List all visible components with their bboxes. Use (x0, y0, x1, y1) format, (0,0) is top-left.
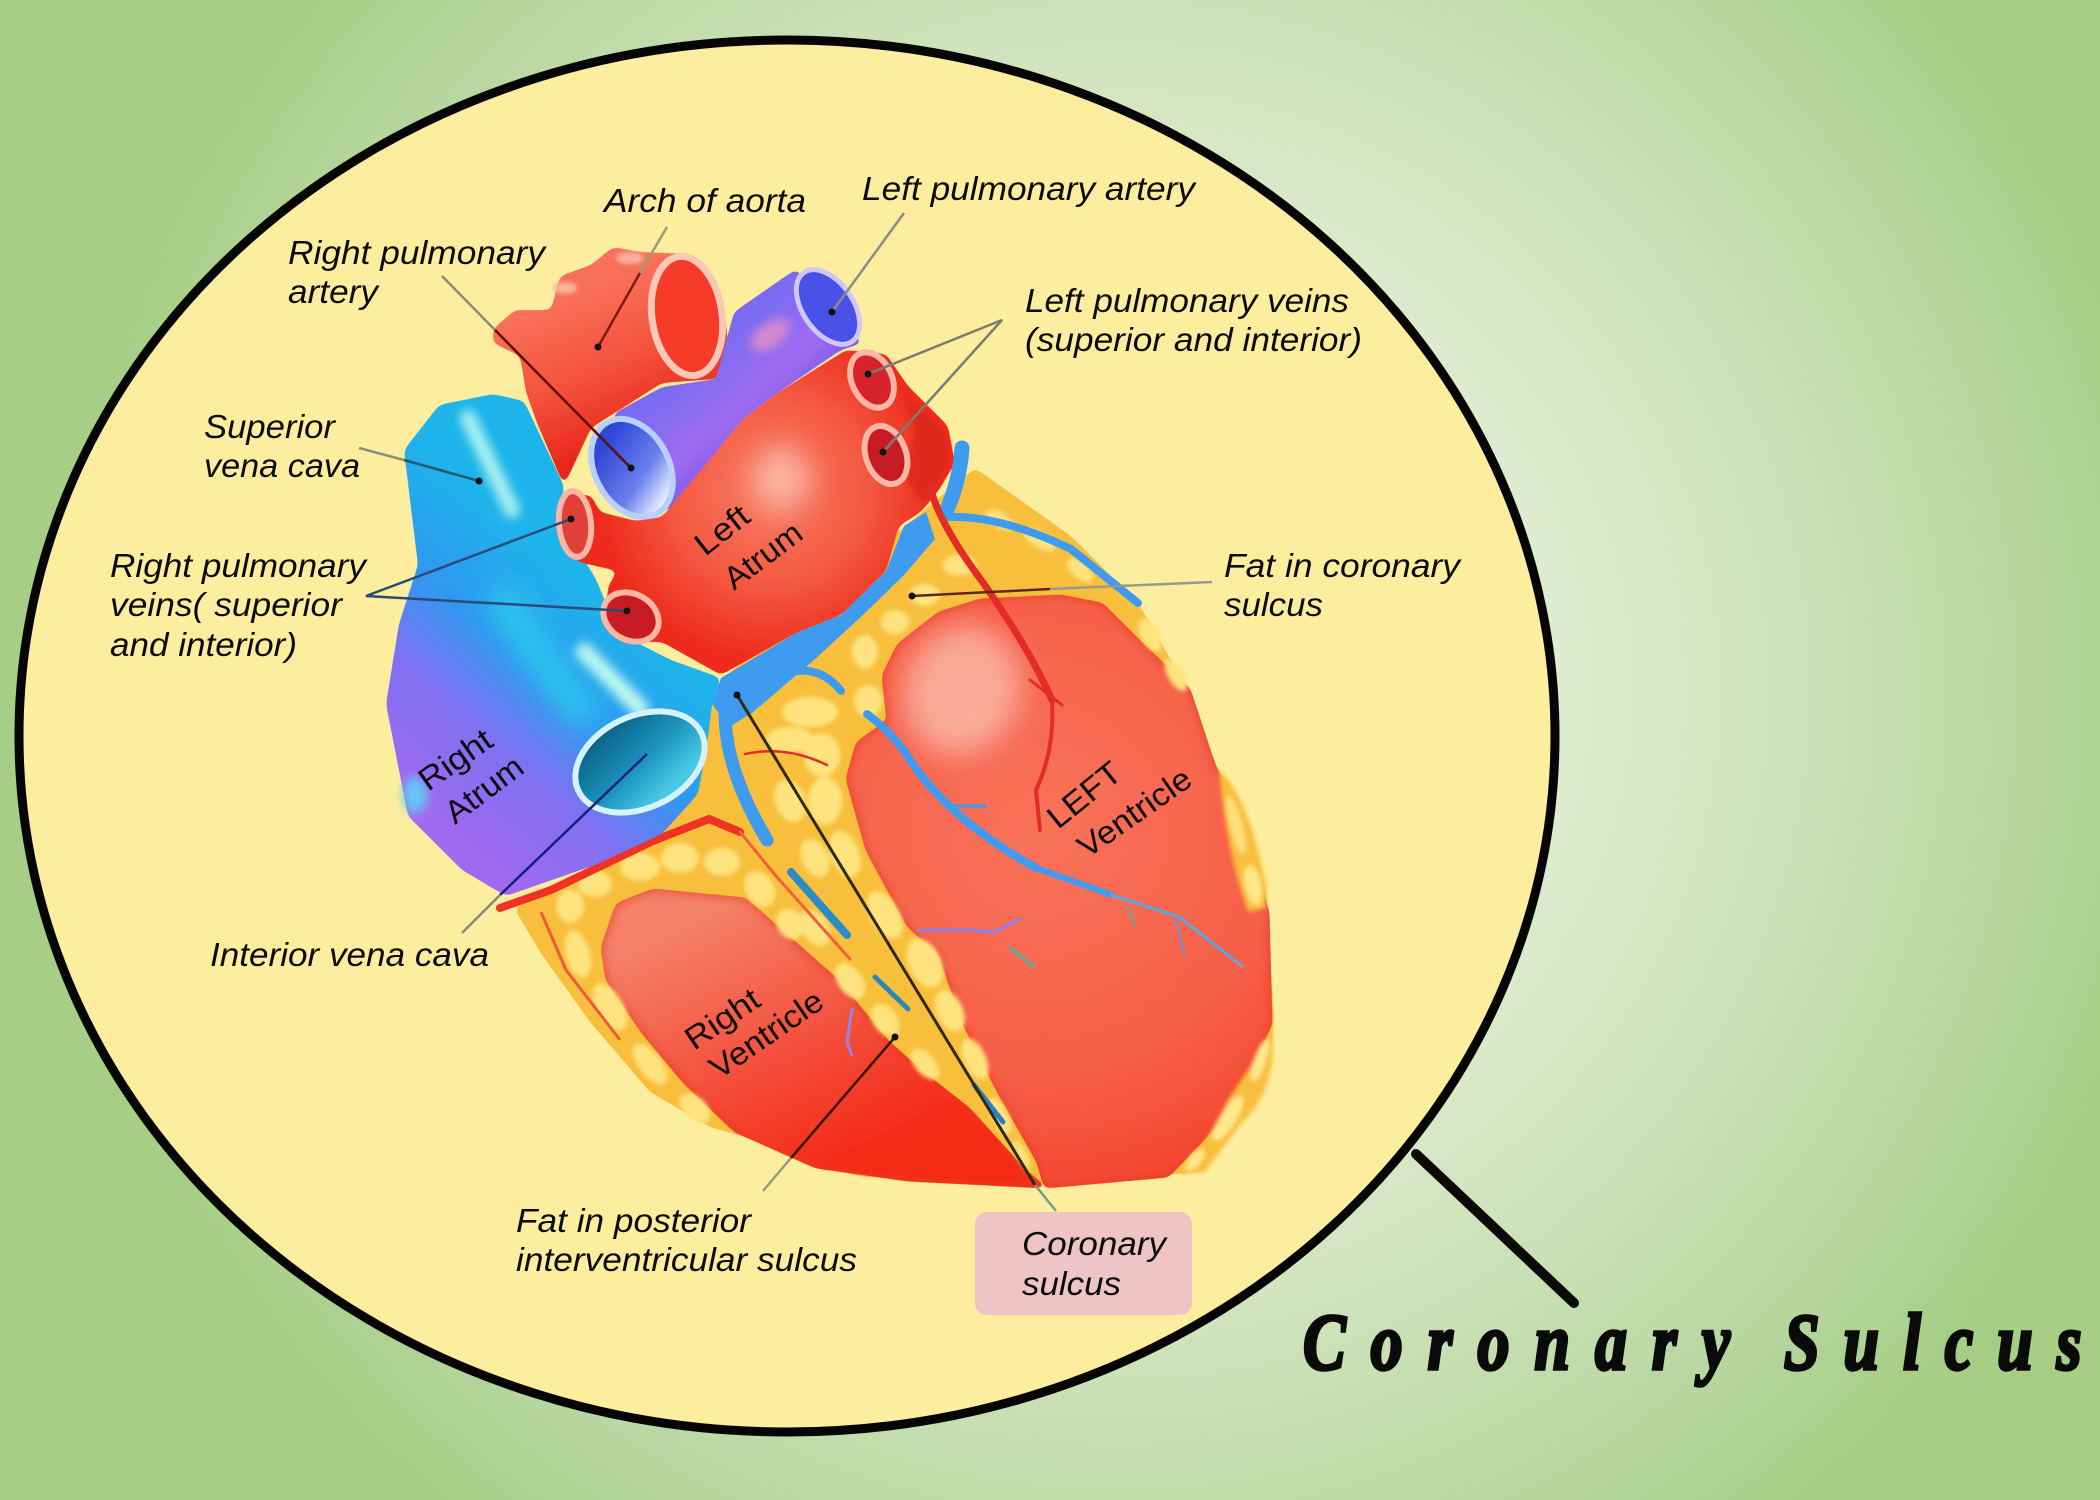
fat base layer (514, 468, 1274, 1187)
label: left pulmonary veins: (superior and interior) (1025, 321, 1362, 358)
label: superior vena cava: Superior (204, 408, 337, 445)
title: Sulcus (1784, 1297, 2082, 1387)
label: right pulmonary artery: artery (288, 273, 381, 310)
label: arch of aorta: Arch of aorta (602, 182, 806, 219)
label: left ventricle: LEFT (1040, 754, 1128, 835)
vessel highlights (468, 418, 512, 510)
red line along left edge of fat (541, 912, 620, 1040)
leader: left pulmonary artery (828, 213, 904, 316)
leader: fat in coronary sulcus (908, 582, 1212, 600)
label: right ventricle: Ventricle (703, 982, 830, 1086)
label: fat in posterior interventricular sulcus (516, 1202, 857, 1278)
label: right pulmonary veins: and interior) (110, 626, 297, 663)
left atrium (556, 345, 955, 675)
label: right pulmonary veins (110, 547, 369, 663)
label: left atrium (687, 497, 809, 597)
leader: left pulmonary veins (864, 320, 1002, 456)
label: right pulmonary veins: veins( superior (110, 586, 344, 623)
callout: coronary sulcus: sulcus (1022, 1265, 1121, 1302)
thin red line through sulcus fat (740, 832, 850, 959)
title (1303, 1297, 2082, 1387)
label: right atrium: Right (411, 721, 499, 798)
leader: right pulmonary veins (366, 516, 630, 614)
left pulmonary vein stubs (842, 345, 902, 415)
pointer line to title (1416, 1154, 1574, 1303)
label: right atrium (411, 721, 530, 831)
right pulmonary vein stubs (556, 490, 594, 558)
left ventricle (847, 596, 1271, 1187)
label: left ventricle: Ventricle (1070, 760, 1198, 865)
label: superior vena cava (204, 408, 360, 484)
label: fat in coronary sulcus (1224, 547, 1463, 623)
left ventricle sheen (885, 608, 1039, 772)
leader: coronary sulcus (734, 692, 1056, 1211)
label: right pulmonary artery (288, 234, 548, 310)
label: fat in coronary sulcus: sulcus (1224, 586, 1323, 623)
label: left atrium: Atrum (717, 514, 809, 597)
leader: inferior vena cava (462, 754, 647, 933)
leader: fat in posterior sulcus (763, 1034, 898, 1191)
label: left atrium: Left (687, 497, 757, 563)
label: right atrium: Atrum (438, 748, 530, 831)
pulmonary trunk (575, 258, 873, 531)
right ventricle (602, 890, 1045, 1187)
heart illustration (386, 247, 1274, 1187)
callout: coronary sulcus: Coronary (1022, 1225, 1169, 1262)
label: right ventricle: Right (678, 980, 767, 1057)
label: fat in coronary sulcus: Fat in coronary (1224, 547, 1463, 584)
label: left pulmonary veins (1025, 282, 1362, 358)
label: left pulmonary artery: Left pulmonary artery (862, 170, 1198, 207)
leader: arch of aorta (594, 227, 667, 350)
inferior vena cava opening (559, 692, 721, 832)
callout: coronary sulcus (975, 1212, 1192, 1315)
fat patches on left ventricle edge (1178, 770, 1273, 1174)
label: right pulmonary artery: Right pulmonary (288, 234, 548, 271)
coronary sinus and blue veins (712, 448, 1242, 1122)
superior vena cava and right atrium (386, 394, 721, 896)
label: fat in posterior interventricular sulcus: Fat in posterior (516, 1202, 753, 1239)
label: fat in posterior interventricular sulcus: interventricular sulcus (516, 1241, 857, 1278)
title: Coronary (1303, 1297, 1731, 1387)
label: interior vena cava: Interior vena cava (210, 936, 489, 973)
label: left pulmonary veins: Left pulmonary veins (1025, 282, 1349, 319)
leader: superior vena cava (359, 448, 482, 484)
fat deposits (556, 505, 1192, 1172)
red coronary artery (745, 490, 1062, 830)
annotation leader lines (359, 213, 1212, 1211)
label: right pulmonary veins: Right pulmonary (110, 547, 369, 584)
arch of aorta (493, 247, 730, 486)
leader: right pulmonary artery (442, 276, 634, 472)
label: left ventricle (1040, 754, 1198, 865)
red border under right atrium (500, 819, 740, 908)
label: superior vena cava: vena cava (204, 447, 360, 484)
circular frame (19, 40, 1555, 1432)
